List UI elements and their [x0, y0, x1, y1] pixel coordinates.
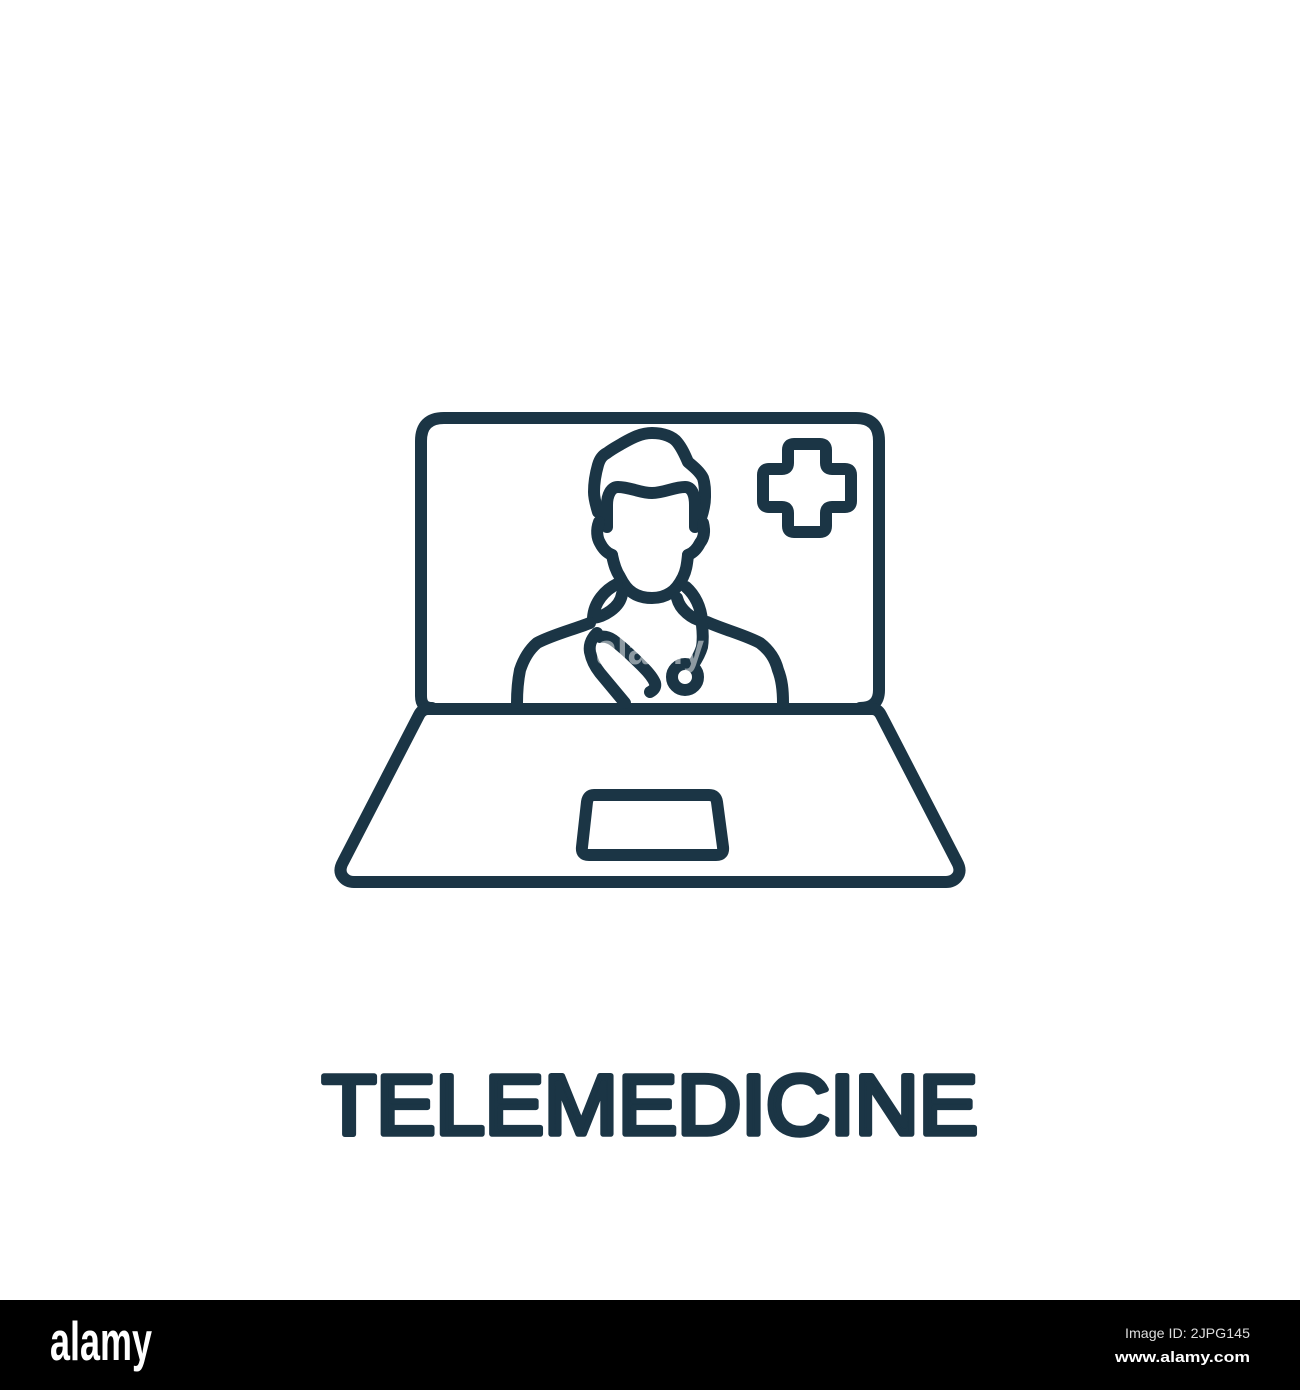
- stethoscope neck tube right: [677, 587, 702, 621]
- icon: medical cross: [763, 444, 851, 532]
- laptop screen: [421, 418, 879, 708]
- doctor left hair side: [597, 522, 612, 555]
- icon: laptop with doctor on screen: [340, 418, 960, 882]
- website: www.alamy.com: [1114, 1349, 1250, 1366]
- alamy logo: alamy: [50, 1310, 152, 1372]
- stethoscope right tube: [693, 625, 703, 665]
- doctor face: [612, 555, 688, 598]
- laptop trackpad: [582, 795, 723, 855]
- title: TELEMEDICINE: [322, 1058, 978, 1152]
- doctor hairline: [607, 487, 695, 527]
- footer bar: [0, 1300, 1300, 1390]
- laptop base: [340, 709, 960, 882]
- doctor right hair side: [688, 523, 704, 555]
- doctor left shoulder: [517, 623, 590, 703]
- doctor right shoulder: [707, 622, 783, 703]
- stethoscope left loop: [590, 633, 625, 703]
- watermark: alamy: [596, 625, 704, 674]
- doctor hair: [594, 433, 705, 518]
- image id: Image ID: 2JPG145: [1125, 1325, 1250, 1341]
- stethoscope neck tube left: [593, 584, 622, 618]
- stethoscope chest piece: [672, 664, 698, 690]
